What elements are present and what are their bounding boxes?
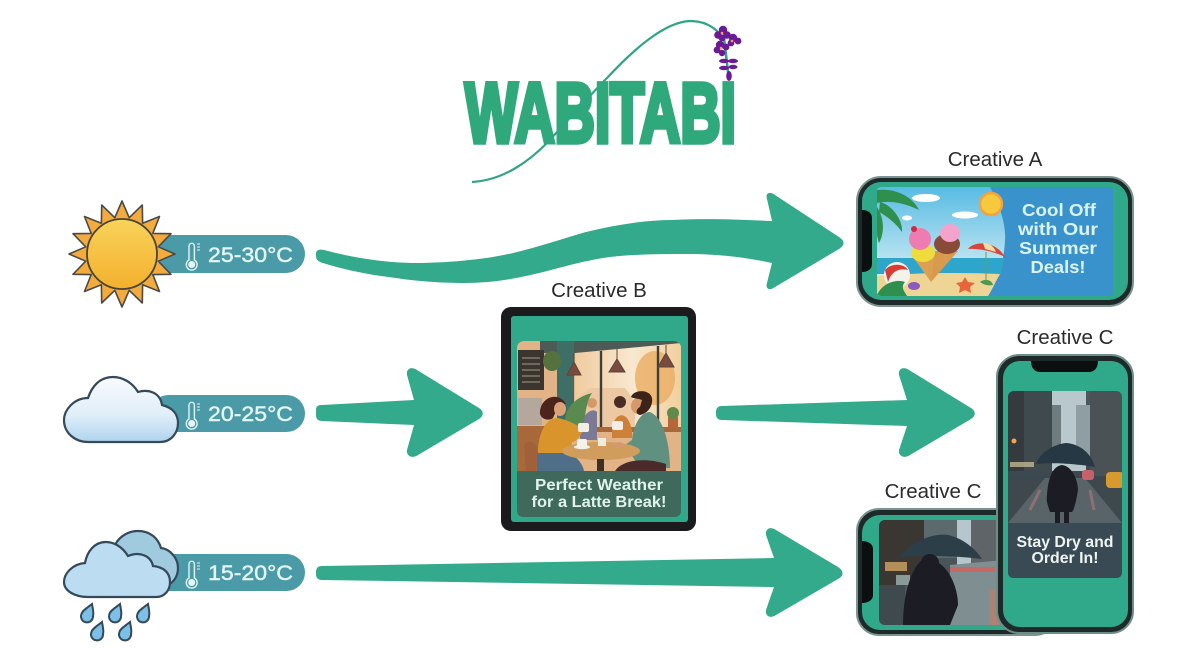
tablet screen [511, 316, 688, 522]
caption: Order In! [1032, 550, 1098, 567]
logo swoosh [472, 21, 720, 182]
notch [862, 210, 872, 272]
coffee machine [518, 398, 542, 425]
tablet: Creative B [501, 307, 696, 531]
logo: Wabitabi [465, 21, 741, 182]
phone: Creative C landscape [857, 509, 1057, 635]
label: Creative C landscape: Creative C [885, 480, 982, 503]
rain photo [1008, 391, 1124, 578]
temperature label: 15-20°C [208, 561, 293, 585]
thermometer icon [186, 243, 200, 270]
caption: for a Latte Break! [532, 494, 666, 511]
figure [903, 559, 958, 625]
phone body [857, 509, 1057, 635]
temperature pill [150, 395, 305, 432]
logo wordmark: WABITABI [465, 66, 736, 160]
phone body [857, 177, 1133, 306]
cones [914, 256, 934, 282]
temperature label: 20-25°C [208, 402, 293, 426]
arrow: mild weather to Creative B [316, 368, 483, 457]
phone screen [1003, 361, 1128, 627]
icon: sun [69, 201, 175, 307]
caption: Perfect Weather [535, 477, 663, 494]
logo flower [714, 26, 741, 81]
temperature pill [150, 554, 305, 591]
thermometer icon [186, 561, 200, 588]
sun [980, 193, 1002, 215]
caption [532, 477, 666, 511]
thermometer icon [186, 402, 200, 429]
chair [524, 442, 538, 471]
tablet body [501, 307, 696, 531]
table [562, 442, 640, 460]
caption: Stay Dry and [1016, 534, 1114, 551]
icon: rain cloud [64, 531, 178, 640]
figure [1047, 465, 1078, 512]
notch [862, 541, 873, 603]
arrow: rainy weather to Creative C [316, 528, 842, 617]
rain photo [879, 520, 1004, 625]
weather row: sunny 25-30°C [69, 201, 305, 307]
plants [565, 393, 592, 426]
ad copy: Summer [1019, 238, 1097, 258]
cafe illustration [517, 341, 681, 471]
arrow: Creative B to Creative C [716, 368, 975, 457]
arrow: hot weather to Creative A [316, 193, 844, 289]
label: Creative B: Creative B [551, 279, 647, 302]
temperature pill [150, 235, 305, 273]
label: Creative C portrait: Creative C [1017, 326, 1114, 349]
phone screen [862, 182, 1128, 300]
phone: Creative A landscape [857, 177, 1133, 306]
starfish [956, 277, 975, 293]
menu board [518, 350, 544, 390]
plant [877, 281, 907, 296]
phone: Creative C portrait [997, 355, 1133, 633]
notch [1031, 361, 1098, 372]
ad panel [877, 187, 1113, 296]
parasol [968, 243, 1005, 257]
beach illustration [876, 187, 1005, 296]
umbrella [900, 535, 982, 559]
label: Creative A: Creative A [948, 148, 1043, 171]
temperature label: 25-30°C [208, 243, 293, 267]
ad copy: with Our [1017, 219, 1098, 239]
background diners [587, 398, 597, 408]
ad copy: Cool Off [1022, 200, 1096, 220]
woman [538, 418, 583, 453]
ad copy [1017, 200, 1098, 277]
weather row: cloudy 20-25°C [64, 377, 305, 442]
lamps [567, 345, 674, 375]
palm leaves [876, 190, 919, 243]
taxi [1106, 472, 1122, 488]
phone body [997, 355, 1133, 633]
man [625, 412, 670, 468]
icon: cloud [64, 377, 178, 442]
ad copy: Deals! [1030, 257, 1086, 277]
caption panel [517, 471, 681, 517]
beach ball [884, 262, 910, 288]
caption panel [1008, 523, 1122, 578]
caption [1016, 534, 1114, 567]
weather row: rainy 15-20°C [64, 531, 305, 640]
umbrella [1036, 443, 1095, 467]
counter [597, 427, 681, 432]
phone screen [862, 515, 1052, 630]
